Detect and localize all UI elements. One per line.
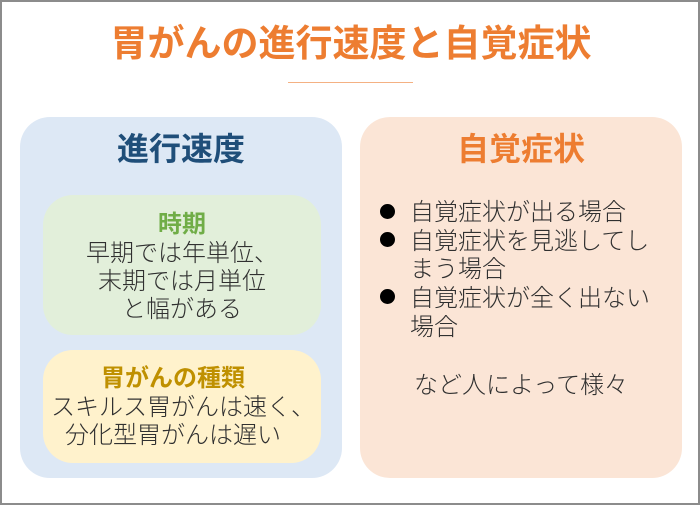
card text: timing: 末期では月単位 (98, 268, 266, 295)
card text: timing: と幅がある (122, 296, 242, 323)
symptom list: 自覚症状が出る場合 (410, 199, 626, 226)
symptom list: 自覚症状を見逃してし (410, 228, 649, 255)
card: timing (43, 195, 321, 335)
card text: cancer type: 分化型胃がんは遅い (65, 422, 281, 449)
card text: timing (86, 240, 278, 323)
card text: cancer type (51, 394, 315, 449)
card text: timing: 早期では年単位、 (86, 240, 278, 267)
card: cancer type (43, 350, 321, 463)
symptom list: 場合 (410, 314, 458, 341)
panel: progression speed (20, 117, 342, 478)
card heading: cancer type: 胃がんの種類 (101, 365, 245, 392)
heading: subjective symptoms: 自覚症状 (457, 131, 585, 167)
heading: progression speed: 進行速度 (117, 131, 245, 167)
symptom list: 自覚症状が全く出ない (410, 285, 650, 312)
symptom list: まう場合 (410, 256, 506, 283)
card heading: timing: 時期 (158, 211, 206, 238)
card text: cancer type: スキルス胃がんは速く、 (51, 394, 315, 421)
title: 胃がんの進行速度と自覚症状 (110, 23, 592, 64)
symptom list (380, 199, 650, 341)
closing note: など人によって様々 (414, 372, 628, 399)
panel: subjective symptoms (360, 117, 682, 478)
